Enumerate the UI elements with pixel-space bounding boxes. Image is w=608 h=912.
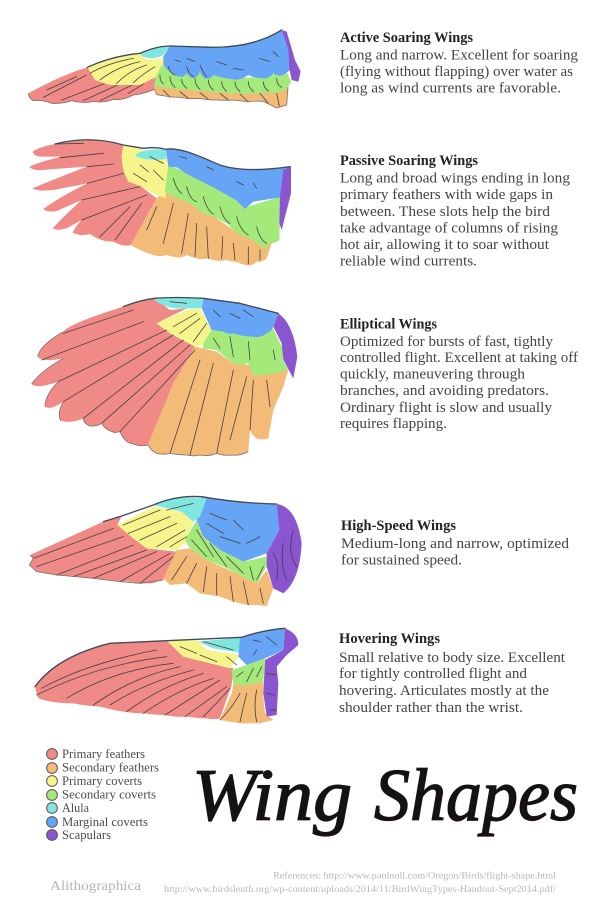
alula bbox=[139, 47, 170, 58]
primary feathers bbox=[28, 67, 156, 103]
secondary coverts bbox=[203, 328, 288, 375]
wing: high-speed bbox=[29, 496, 302, 606]
scapulars bbox=[273, 313, 297, 378]
feather lines bbox=[55, 143, 267, 264]
scapulars bbox=[263, 628, 298, 717]
leading edge bbox=[87, 30, 282, 67]
primary feathers bbox=[29, 140, 157, 246]
legend bbox=[47, 747, 159, 842]
primary coverts bbox=[87, 53, 166, 85]
secondary feathers bbox=[163, 548, 273, 606]
description: elliptical: Elliptical Wings bbox=[340, 316, 437, 332]
leading edge bbox=[103, 496, 277, 522]
description: high-speed: for sustained speed. bbox=[341, 552, 462, 568]
trailing edge bbox=[32, 332, 248, 456]
wing: passive soaring bbox=[29, 140, 291, 265]
legend: Alula bbox=[62, 801, 89, 815]
description: active soaring bbox=[340, 30, 578, 96]
description: elliptical: controlled flight. Excellent at taking off bbox=[340, 350, 578, 366]
legend: Secondary coverts bbox=[62, 788, 156, 802]
legend: Primary feathers bbox=[62, 747, 145, 761]
legend: Primary coverts bbox=[62, 774, 142, 788]
wing: elliptical bbox=[32, 297, 297, 456]
feather lines bbox=[43, 52, 282, 106]
feather lines bbox=[42, 302, 275, 455]
leading edge bbox=[35, 628, 285, 687]
alula bbox=[153, 298, 203, 309]
description: elliptical: Optimized for bursts of fast, tightly bbox=[340, 334, 554, 350]
feather lines bbox=[37, 637, 277, 722]
secondary coverts bbox=[232, 658, 265, 685]
references: References: http://www.paulnoll.com/Oregon/Birds/flight-shape.html bbox=[273, 870, 556, 882]
description: hovering: Hovering Wings bbox=[339, 631, 440, 647]
wing: active soaring bbox=[28, 30, 301, 108]
scapulars bbox=[282, 30, 301, 82]
credit: Alithographica bbox=[50, 879, 142, 894]
description: hovering bbox=[339, 631, 565, 716]
wing: hovering bbox=[35, 628, 298, 723]
description: elliptical: Ordinary flight is slow and usually bbox=[340, 400, 553, 416]
title: Shapes bbox=[374, 755, 578, 837]
scapulars bbox=[267, 504, 302, 593]
primary feathers bbox=[32, 298, 195, 446]
scapulars bbox=[279, 167, 291, 230]
description: active soaring: Long and narrow. Excellent for soaring bbox=[340, 48, 578, 64]
secondary feathers bbox=[148, 347, 288, 456]
secondary feathers bbox=[220, 680, 273, 723]
primary coverts bbox=[117, 507, 193, 550]
description: passive soaring bbox=[340, 153, 570, 270]
title: Wing bbox=[192, 755, 352, 837]
description: passive soaring: between. These slots help the bird bbox=[340, 204, 551, 220]
marginal coverts bbox=[238, 628, 285, 665]
primary coverts bbox=[167, 641, 240, 668]
description: hovering: hovering. Articulates mostly at the bbox=[339, 683, 549, 699]
secondary coverts bbox=[154, 65, 291, 94]
references: http://www.birdsleuth.org/wp-content/uploads/2014/11/BirdWingTypes-Handout-Sept2014.pdf/ bbox=[164, 884, 556, 895]
trailing edge bbox=[28, 87, 288, 108]
trailing edge bbox=[29, 555, 163, 583]
description: hovering: Small relative to body size. Excellent bbox=[339, 650, 565, 666]
secondary feathers bbox=[131, 192, 272, 265]
legend: Secondary feathers bbox=[62, 760, 159, 774]
feather lines bbox=[33, 503, 297, 605]
alula bbox=[153, 497, 207, 522]
description: high-speed: Medium-long and narrow, optimized bbox=[341, 536, 570, 552]
description: high-speed bbox=[341, 518, 570, 568]
title bbox=[192, 755, 578, 837]
description: passive soaring: hot air, allowing it to soar without bbox=[340, 237, 549, 253]
marginal coverts bbox=[202, 298, 278, 337]
description: hovering: shoulder rather than the wrist. bbox=[339, 700, 523, 716]
primary feathers bbox=[35, 641, 233, 719]
description: active soaring: (flying without flapping) over water as bbox=[340, 64, 573, 80]
description: elliptical: branches, and avoiding predators. bbox=[340, 383, 549, 399]
legend: Marginal coverts bbox=[62, 815, 148, 829]
primary coverts bbox=[157, 308, 212, 347]
description: elliptical: quickly, maneuvering through bbox=[340, 366, 526, 382]
primary coverts bbox=[122, 145, 168, 198]
primary feathers bbox=[29, 516, 177, 583]
description: active soaring: Active Soaring Wings bbox=[340, 30, 473, 46]
description: passive soaring: Passive Soaring Wings bbox=[340, 153, 478, 169]
description: elliptical: requires flapping. bbox=[340, 416, 447, 432]
description: passive soaring: reliable wind currents. bbox=[340, 254, 477, 270]
description: passive soaring: primary feathers with wide gaps in bbox=[340, 187, 554, 203]
description: active soaring: long as wind currents are favorable. bbox=[340, 80, 561, 96]
secondary feathers bbox=[154, 85, 288, 108]
marginal coverts bbox=[163, 30, 290, 80]
secondary coverts bbox=[185, 520, 267, 583]
alula bbox=[135, 149, 167, 160]
description: hovering: for tightly controlled flight and bbox=[339, 666, 528, 682]
secondary coverts bbox=[165, 165, 281, 247]
description: passive soaring: Long and broad wings ending in long bbox=[340, 170, 570, 186]
alula bbox=[198, 637, 242, 653]
leading edge bbox=[123, 297, 278, 313]
marginal coverts bbox=[197, 497, 279, 562]
leading edge bbox=[55, 140, 290, 170]
references bbox=[164, 870, 556, 895]
description: elliptical bbox=[340, 316, 578, 432]
description: passive soaring: take advantage of columns of rising bbox=[340, 220, 558, 236]
legend: Scapulars bbox=[62, 828, 111, 842]
description: high-speed: High-Speed Wings bbox=[341, 518, 456, 534]
marginal coverts bbox=[166, 149, 290, 209]
